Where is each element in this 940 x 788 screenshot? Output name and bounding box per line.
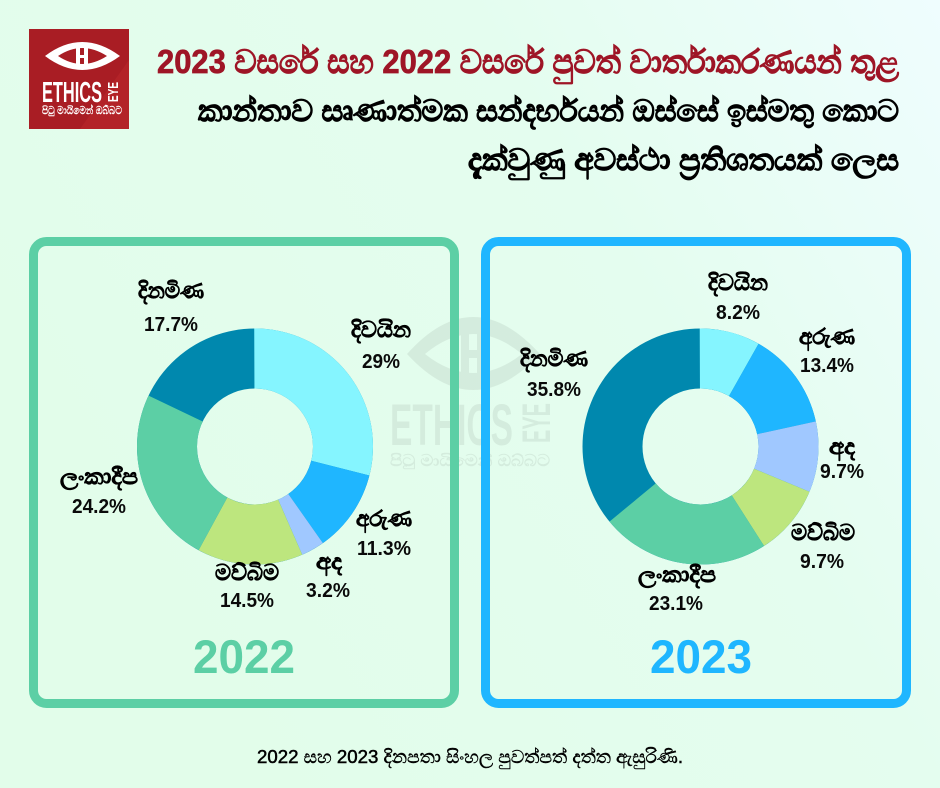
label: Dinamina 2022 [138, 278, 204, 336]
label: Dinamina 2023: දිනමිණ [520, 346, 588, 373]
label: Aruna 2022: 11.3% [357, 538, 411, 560]
watermark logo [390, 317, 559, 470]
title line 1: 2023 වසරේ සහ 2022 වසරේ පුවත් වාර්තාකරණයන් තුළ [157, 43, 900, 84]
label: Dinamina 2022: 17.7% [144, 314, 198, 336]
label: Ada 2022 [306, 549, 350, 602]
title [157, 43, 900, 181]
label: Mawbima 2023: මව්බිම [791, 520, 855, 545]
label: Ada 2022: 3.2% [306, 580, 350, 602]
footer source note: 2022 සහ 2023 දිනපතා සිංහල පුවත්පත් දත්ත ඇසුරිණි. [257, 747, 683, 769]
label: Divaina 2022: 29% [362, 351, 400, 373]
label: Ada 2023: අද [829, 434, 855, 461]
label: Mawbima 2022: මව්බිම [215, 560, 279, 585]
panel: 2022 [34, 242, 454, 704]
logo: Ethics Eye: පිටු මායිමෙන් ඔබ්බට [42, 103, 122, 117]
label: Divaina 2023: දිවයින [708, 270, 768, 297]
label: Mawbima 2022: 14.5% [220, 590, 274, 612]
logo: Ethics Eye [29, 29, 129, 129]
label: Aruna 2023 [799, 324, 855, 377]
year 2023: 2023 [650, 630, 752, 683]
label: Divaina 2023: 8.2% [716, 302, 760, 324]
label: Divaina 2022 [351, 317, 411, 373]
logo eye icon [45, 42, 120, 70]
label: Lankadeepa 2022 [60, 464, 138, 518]
label: Aruna 2022 [356, 506, 412, 560]
watermark logo: පිටු මායිමෙන් ඔබ්බට [390, 452, 551, 470]
label: Dinamina 2023: 35.8% [527, 379, 581, 401]
label: Ada 2023 [820, 434, 864, 483]
donut chart 2022 [167, 358, 343, 534]
logo: Ethics Eye: ETHICS [42, 77, 102, 109]
title line 2: කාන්තාව සෘණාත්මක සන්දර්භයන් ඔස්සේ ඉස්මතු කොට [198, 95, 899, 130]
label: Divaina 2022: දිවයින [351, 317, 411, 344]
label: Aruna 2023: අරුණ [799, 324, 855, 351]
donut chart 2023 [612, 358, 788, 534]
panel: 2023 [486, 242, 906, 704]
title line 3: දැක්වුණු අවස්ථා ප්‍රතිශතයක් ලෙස [468, 144, 899, 181]
label: Dinamina 2022: දිනමිණ [138, 278, 204, 305]
label: Lankadeepa 2023: 23.1% [649, 593, 703, 615]
label: Divaina 2023 [708, 270, 768, 324]
label: Mawbima 2022 [215, 560, 279, 612]
label: Aruna 2022: අරුණ [356, 506, 412, 533]
label: Aruna 2023: 13.4% [800, 355, 854, 377]
label: Mawbima 2023 [791, 520, 855, 573]
watermark logo: ETHICS [390, 393, 513, 458]
label: Dinamina 2023 [520, 346, 588, 401]
label: Lankadeepa 2023: ලංකාදීප [638, 562, 716, 589]
label: Lankadeepa 2022: 24.2% [72, 496, 126, 518]
label: Lankadeepa 2023 [638, 562, 716, 615]
label: Mawbima 2023: 9.7% [800, 551, 844, 573]
logo: Ethics Eye: EYE [105, 82, 122, 102]
year 2022: 2022 [193, 630, 295, 683]
label: Ada 2022: අද [316, 549, 342, 576]
watermark logo: EYE [515, 403, 559, 443]
label: Ada 2023: 9.7% [820, 461, 864, 483]
label: Lankadeepa 2022: ලංකාදීප [60, 464, 138, 491]
